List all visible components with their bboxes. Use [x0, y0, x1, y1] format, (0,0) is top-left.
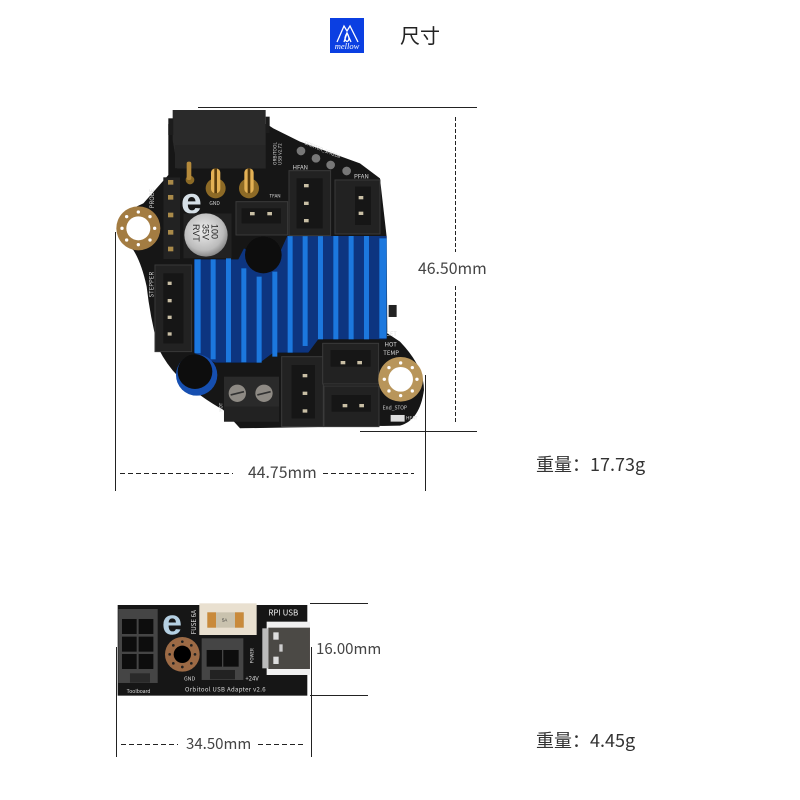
capacitor: 100 [210, 224, 220, 239]
label: width 44.75mm: 44.75mm [248, 460, 317, 483]
logo: mellow [330, 18, 364, 53]
connector: hot temp [323, 343, 379, 384]
terminal block [224, 377, 279, 422]
silkscreen labels: USB v2.72 [278, 143, 284, 165]
logo: mellow: mellow [335, 41, 360, 51]
silkscreen labels: SET [387, 329, 397, 338]
silkscreen labels: FUSE 6A [189, 610, 198, 634]
mounting ring left [116, 206, 160, 250]
USB-C connector [262, 622, 310, 675]
power connector [202, 638, 243, 680]
silkscreen labels: STEPPER [146, 272, 155, 297]
mounting ring [165, 637, 200, 672]
silkscreen labels: Orbitool USB Adapter v2.6 [185, 685, 266, 694]
adapter board photo [118, 601, 310, 696]
solder pads and pins [186, 162, 259, 198]
silkscreen labels: TFAN [269, 193, 281, 199]
capacitor: 35V [200, 224, 210, 240]
sensor pads [297, 147, 351, 175]
heatsink [194, 236, 387, 363]
connector: HFAN [289, 171, 331, 236]
silkscreen labels: HOT [385, 340, 397, 349]
silkscreen labels: GND [184, 674, 196, 682]
silkscreen labels [127, 607, 298, 695]
silkscreen labels: TEMP [383, 348, 399, 357]
connector: bottom left [282, 357, 323, 427]
label: weight main board: 重量：17.73g [536, 451, 645, 477]
silkscreen labels: PROBE [147, 188, 156, 208]
silkscreen labels: HEAT [406, 415, 418, 421]
dimension lines: main board [116, 108, 477, 491]
connector: stepper [155, 265, 192, 352]
side component [389, 305, 397, 317]
silkscreen labels [146, 140, 418, 421]
toolboard connector [118, 609, 158, 683]
capacitor: RVT [191, 224, 201, 242]
fuse holder: 5A [222, 618, 227, 623]
dimension lines: adapter board [116, 604, 368, 757]
heat LED [391, 415, 405, 422]
heading: size: 尺寸 [400, 20, 440, 49]
main board photo [116, 110, 424, 428]
silkscreen labels: POWER [250, 648, 256, 663]
silkscreen labels: ORBITOOL [273, 142, 279, 165]
blue capacitor bottom [176, 354, 217, 396]
label: width 34.50mm: 34.50mm [186, 733, 251, 754]
label: height 16.00mm: 16.00mm [316, 638, 381, 659]
connector: TFAN [236, 202, 288, 235]
silkscreen labels: PFAN [354, 172, 369, 181]
silkscreen labels: HFAN [293, 162, 308, 171]
label: height 46.50mm: 46.50mm [418, 256, 487, 279]
fuse holder [199, 603, 257, 635]
mounting ring right [378, 357, 423, 402]
silkscreen labels: End_STOP [383, 404, 407, 411]
silkscreen labels: ORBITER_SFA2D8 [303, 140, 341, 160]
silkscreen labels: Toolboard [127, 688, 151, 695]
silkscreen labels: HOT [219, 402, 225, 412]
silkscreen labels: GND [209, 200, 220, 207]
logo mark on board: e [181, 179, 202, 221]
silkscreen labels: RPI USB [268, 607, 298, 618]
silkscreen labels: +24V [245, 673, 259, 682]
probe header [163, 177, 180, 259]
connector: PFAN [335, 180, 380, 234]
connector: end stop [324, 386, 379, 427]
black capacitor top [245, 237, 282, 273]
top connector [168, 110, 270, 168]
logo mark: e [162, 601, 182, 642]
capacitor [183, 213, 232, 258]
label: weight adapter: 重量：4.45g [536, 727, 635, 753]
